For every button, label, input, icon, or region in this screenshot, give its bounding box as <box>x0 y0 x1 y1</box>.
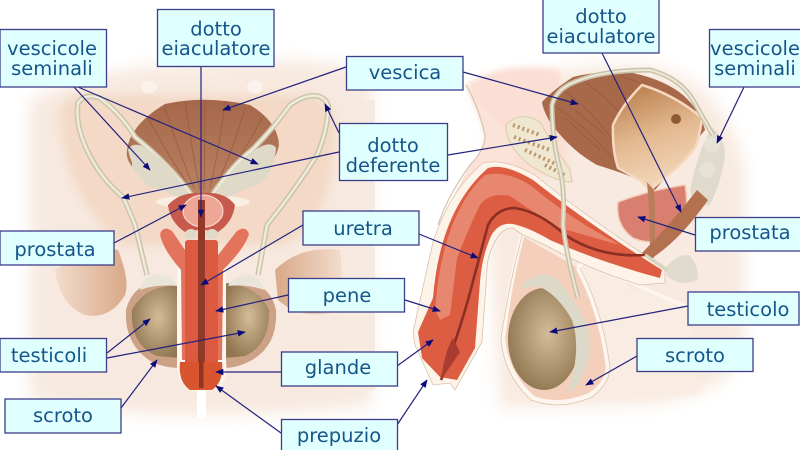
label: prepuzio: prepuzio <box>297 424 381 447</box>
label: testicolo: testicolo <box>707 298 789 321</box>
illustration: side view <box>413 65 745 408</box>
bulbourethral gland <box>645 255 670 272</box>
seminal vesicles <box>128 144 276 202</box>
label: prepuzio <box>282 420 398 450</box>
label: scroto (left): scroto <box>33 404 93 427</box>
label: testicoli <box>0 338 106 372</box>
epididymis <box>519 274 589 391</box>
label: glande <box>282 352 398 386</box>
label: testicolo <box>688 292 799 325</box>
prostate <box>618 185 687 242</box>
label: scroto (right): scroto <box>665 344 725 367</box>
label: vescicole seminali (right): seminali <box>714 57 796 80</box>
pubic bone <box>506 117 572 182</box>
label: dotto eiaculatore (left): dotto <box>190 18 242 40</box>
illustration: front view <box>30 61 375 418</box>
label: uretra <box>303 211 419 245</box>
label: pene: pene <box>323 284 371 307</box>
label: dotto eiaculatore (right): eiaculatore <box>547 25 655 48</box>
label: glande: glande <box>305 356 371 379</box>
label: prostata (left): prostata <box>14 238 96 261</box>
label: dotto eiaculatore (left): eiaculatore <box>162 37 270 60</box>
label: scroto (left) <box>5 399 121 433</box>
prostate <box>168 193 235 232</box>
label: vescicole seminali (right) <box>710 30 800 87</box>
label: dotto deferente <box>340 124 448 180</box>
label: dotto eiaculatore (right): dotto <box>575 5 627 28</box>
label: dotto eiaculatore (left) <box>158 10 274 66</box>
seminal vesicle <box>690 127 725 207</box>
label: prostata (right) <box>696 218 800 251</box>
label: vescicole seminali (left): vescicole <box>7 37 97 60</box>
label: pene <box>288 278 404 312</box>
crura and penis <box>177 255 226 391</box>
label: dotto eiaculatore (right) <box>543 0 659 53</box>
bladder <box>542 72 705 190</box>
vas deferens <box>552 70 713 298</box>
label: scroto (right) <box>637 338 753 372</box>
testes and scrotum <box>126 283 180 368</box>
label: vescica: vescica <box>369 61 441 84</box>
label: testicoli: testicoli <box>11 344 87 367</box>
label: uretra: uretra <box>333 217 393 240</box>
label: dotto deferente: deferente <box>346 154 440 177</box>
label: vescicole seminali (right): vescicole <box>710 37 800 60</box>
vas deferens <box>77 96 328 275</box>
label: vescica <box>346 56 463 90</box>
bladder <box>127 100 279 196</box>
scrotum <box>503 236 700 402</box>
pointer arrows <box>74 53 744 433</box>
penis <box>413 162 665 390</box>
label: prostata (right): prostata <box>709 221 791 244</box>
label: vescicole seminali (left) <box>0 30 106 87</box>
label: prostata (left) <box>0 231 114 265</box>
label: vescicole seminali (left): seminali <box>11 57 93 80</box>
label: dotto deferente: dotto <box>367 134 419 157</box>
